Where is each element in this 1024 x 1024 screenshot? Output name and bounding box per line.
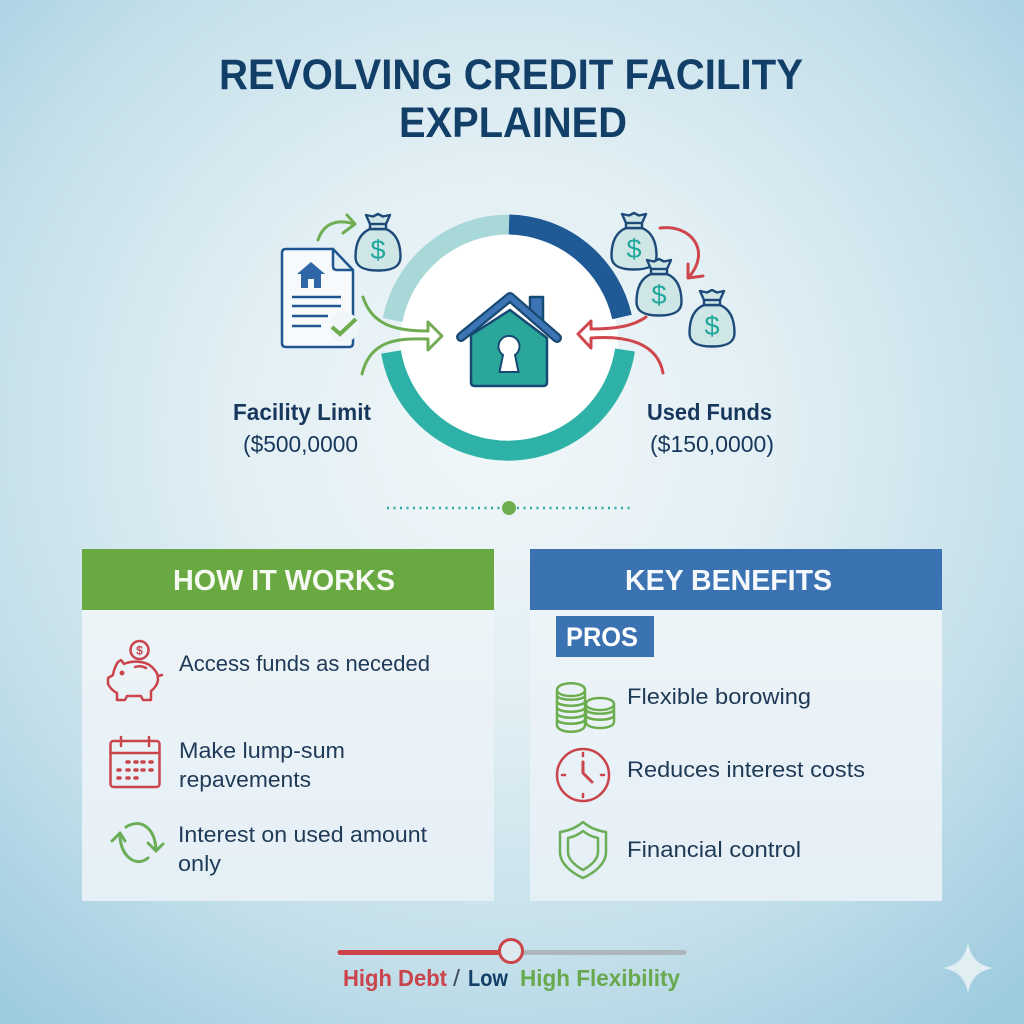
donut diagram xyxy=(391,224,625,452)
green arrows xyxy=(318,215,442,374)
text: flexible borrowing: Flexible borowing xyxy=(627,684,811,709)
panel: key benefits xyxy=(530,549,942,901)
text: interest on used amount xyxy=(178,822,427,876)
slider xyxy=(340,940,684,962)
label: used funds: Used Funds xyxy=(647,399,772,425)
title: EXPLAINED xyxy=(399,99,627,147)
icon: house with keyhole xyxy=(461,297,557,386)
heading: key benefits: KEY BENEFITS xyxy=(625,565,832,597)
label: facility limit xyxy=(233,399,371,457)
text: lump-sum repayments: Make lump-sum xyxy=(179,738,345,763)
pros badge xyxy=(556,616,654,657)
title: REVOLVING CREDIT FACILITY xyxy=(219,51,803,99)
divider xyxy=(387,501,634,515)
text: lump-sum repayments: repavements xyxy=(179,767,311,792)
label: used funds xyxy=(647,399,774,457)
icon: loan document xyxy=(282,249,359,347)
icon: clock xyxy=(557,749,609,801)
red arrows xyxy=(578,228,703,373)
icon: coin stacks xyxy=(557,683,614,732)
heading: key benefits xyxy=(530,549,942,610)
pros badge: PROS xyxy=(566,622,638,652)
sparkle xyxy=(943,943,993,993)
text: access funds: Access funds as neceded xyxy=(179,651,430,676)
slider labels: High Debt xyxy=(343,965,447,991)
label: facility limit: ($500,0000 xyxy=(243,431,358,457)
text: reduces interest costs: Reduces interest costs xyxy=(627,757,865,782)
text: interest on used amount: only xyxy=(178,851,221,876)
slider labels: Low xyxy=(468,965,508,991)
icon: piggy bank xyxy=(108,641,162,700)
title xyxy=(219,51,803,147)
heading: how it works: HOW IT WORKS xyxy=(173,565,395,597)
label: used funds: ($150,0000) xyxy=(650,431,774,457)
icon: money bags xyxy=(356,213,734,346)
icon: piggy bank: $ xyxy=(136,644,143,658)
panel: how it works xyxy=(82,549,494,901)
heading: how it works xyxy=(82,549,494,610)
slider labels xyxy=(343,965,680,991)
text: financial control: Financial control xyxy=(627,837,801,862)
label: facility limit: Facility Limit xyxy=(233,399,371,425)
text: lump-sum repayments xyxy=(179,738,345,792)
icon: shield xyxy=(560,822,606,878)
slider labels: High Flexibility xyxy=(520,965,680,991)
slider labels: / xyxy=(453,965,461,991)
icon: calendar xyxy=(110,737,160,787)
text: interest on used amount: Interest on used amount xyxy=(178,822,427,847)
icon: cycle arrows xyxy=(112,824,163,862)
